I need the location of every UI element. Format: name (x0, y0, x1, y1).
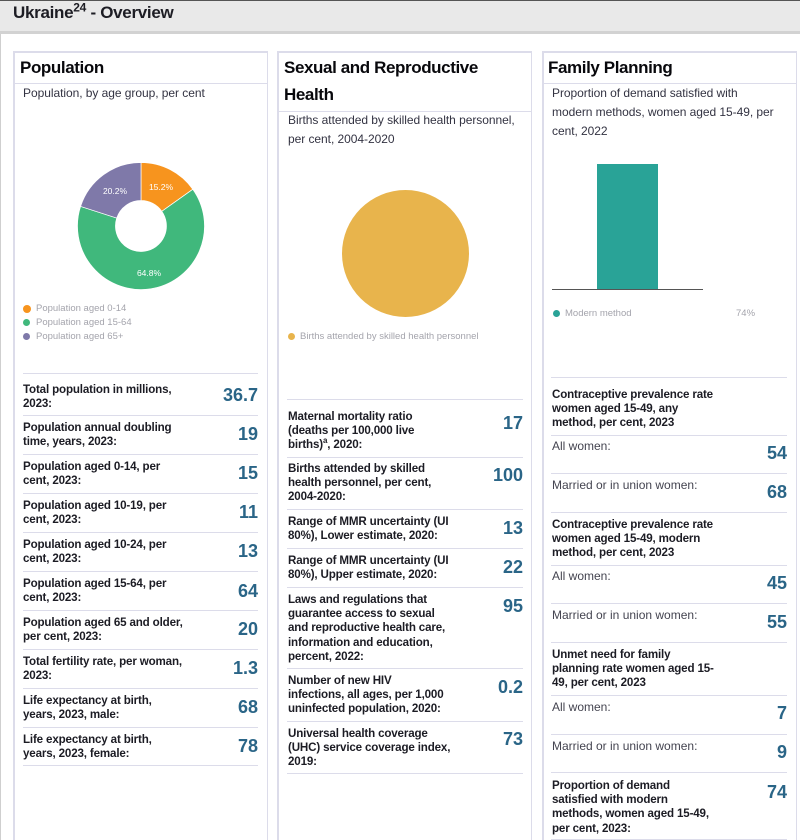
stat: births attended: 2004-2020: (288, 490, 346, 503)
value: aged 15-64: 64 (238, 581, 258, 601)
stat: CPR any method (552, 388, 713, 429)
stat: aged 10-24 (23, 538, 166, 565)
stat: new HIV infections: infections, all ages, per 1,000 (288, 688, 444, 701)
stat: demand satisfied (552, 779, 709, 835)
stat: maternal mortality: Maternal mortality ratio (288, 410, 412, 423)
stat: CPR modern method (552, 518, 713, 559)
bar chart: modern method (552, 164, 703, 290)
stat: MMR upper: Range of MMR uncertainty (UI (288, 554, 448, 567)
stat: doubling time (23, 421, 171, 448)
stat: aged 10-19 (23, 499, 166, 526)
value: aged 10-19: 11 (239, 502, 258, 522)
legend: population (23, 303, 132, 342)
legend: modern method: Modern method (565, 308, 632, 319)
value: CPR any all women: 54 (767, 443, 787, 463)
value: doubling time: 19 (238, 424, 258, 444)
stat: MMR lower: 80%), Lower estimate, 2020: (288, 529, 438, 542)
stat: maternal mortality (288, 410, 414, 451)
value: demand satisfied: 74 (767, 782, 787, 802)
value: maternal mortality: 17 (503, 413, 523, 433)
stat: laws and regulations: information and education, (288, 636, 433, 649)
stat: aged 15-64 (23, 577, 166, 604)
stat: UHC index: 2019: (288, 755, 317, 768)
chart subtitle: births attended: per cent, 2004-2020 (288, 132, 394, 146)
stat: new HIV infections: Number of new HIV (288, 674, 392, 687)
stat: UHC index: Universal health coverage (288, 727, 428, 740)
donut chart: population by age group (78, 163, 204, 290)
panel: population (13, 51, 268, 840)
stat: aged 0-14: cent, 2023: (23, 474, 81, 487)
stat: aged 65 and older (23, 616, 183, 643)
stat: unmet need (552, 648, 714, 689)
heading: family planning: Family Planning (548, 58, 672, 77)
chart subtitle: demand satisfied: modern methods, women aged 15-49, per (552, 105, 774, 119)
chart subtitle: births attended: Births attended by skilled health personnel, (288, 113, 515, 127)
panel: sexual and reproductive health (277, 51, 532, 840)
donut chart: population by age group: 20.2% (103, 186, 127, 196)
stat: new HIV infections (288, 674, 444, 715)
stat: aged 0-14 (23, 460, 160, 487)
value: CPR modern all women: 45 (767, 573, 787, 593)
stat: demand satisfied: satisfied with modern (552, 793, 668, 806)
stat: unmet need: 49, per cent, 2023 (552, 676, 646, 689)
stat: life expectancy female: years, 2023, female: (23, 747, 129, 760)
panel: family planning (542, 51, 797, 840)
value: aged 65 and older: 20 (238, 619, 258, 639)
page header bar (0, 0, 800, 34)
stat: life expectancy male (23, 694, 152, 721)
value: CPR any married women: 68 (767, 482, 787, 502)
value: aged 10-24: 13 (238, 541, 258, 561)
note: all women: All women: (552, 569, 611, 583)
stat: life expectancy female: Life expectancy at birth, (23, 733, 152, 746)
stat: aged 10-19: Population aged 10-19, per (23, 499, 166, 512)
page edge (0, 34, 1, 840)
stat: aged 10-24: Population aged 10-24, per (23, 538, 166, 551)
stat: demand satisfied: Proportion of demand (552, 779, 670, 792)
stat: aged 65 and older: Population aged 65 and older, (23, 616, 183, 629)
legend: modern method: 74% (736, 308, 755, 319)
note: all women: All women: (552, 439, 611, 453)
stat: MMR lower: Range of MMR uncertainty (UI (288, 515, 448, 528)
value: MMR upper: 22 (503, 557, 523, 577)
stat: total population (23, 383, 171, 410)
value: CPR modern married women: 55 (767, 612, 787, 632)
stat: MMR upper: 80%), Upper estimate, 2020: (288, 568, 437, 581)
stat: UHC index (288, 727, 450, 768)
value: unmet married women: 9 (777, 742, 787, 762)
stat: aged 65 and older: per cent, 2023: (23, 630, 102, 643)
stat: total population: 2023: (23, 397, 52, 410)
stat: demand satisfied: per cent, 2023: (552, 822, 631, 835)
stat: maternal mortality: births)a, 2020: (288, 437, 362, 451)
value: aged 0-14: 15 (238, 463, 258, 483)
stat: UHC index: (UHC) service coverage index, (288, 741, 450, 754)
value: laws and regulations: 95 (503, 596, 523, 616)
stat: life expectancy female (23, 733, 152, 760)
stat: laws and regulations: guarantee access to sexual (288, 607, 435, 620)
value: life expectancy female: 78 (238, 736, 258, 756)
stat: new HIV infections: uninfected population, 2020: (288, 702, 441, 715)
note: married women: Married or in union women: (552, 478, 697, 492)
stat: aged 15-64: Population aged 15-64, per (23, 577, 166, 590)
stat: unmet need: planning rate women aged 15- (552, 662, 714, 675)
stat: aged 10-19: cent, 2023: (23, 513, 81, 526)
stat: unmet need: Unmet need for family (552, 648, 670, 661)
chart subtitle: demand satisfied: Proportion of demand satisfied with (552, 86, 738, 100)
stat: births attended (288, 462, 431, 503)
bar: modern method (597, 164, 658, 289)
stat: MMR upper (288, 554, 448, 581)
stat: life expectancy male: Life expectancy at birth, (23, 694, 152, 707)
stat: fertility rate (23, 655, 182, 682)
value: total population: 36.7 (223, 385, 258, 405)
heading: sexual and reproductive health (284, 58, 478, 104)
heading: population: Population (20, 58, 104, 77)
stat: doubling time: Population annual doubling (23, 421, 171, 434)
stat: aged 15-64: cent, 2023: (23, 591, 81, 604)
stat: maternal mortality: (deaths per 100,000 live (288, 424, 414, 437)
chart subtitle: births attended (288, 113, 515, 146)
stat: fertility rate: Total fertility rate, per woman, (23, 655, 182, 668)
chart subtitle: population: Population, by age group, per cent (23, 86, 205, 100)
donut chart: population by age group: 64.8% (137, 268, 161, 278)
value: unmet all women: 7 (777, 703, 787, 723)
value: new HIV infections: 0.2 (498, 677, 523, 697)
stat: CPR any method: method, per cent, 2023 (552, 416, 674, 429)
stat: CPR any method: women aged 15-49, any (552, 402, 678, 415)
stat: doubling time: time, years, 2023: (23, 435, 117, 448)
chart subtitle: demand satisfied: cent, 2022 (552, 124, 608, 138)
stat: total population: Total population in millions, (23, 383, 171, 396)
stat: laws and regulations: and reproductive health care, (288, 621, 445, 634)
pie chart: births attended (342, 190, 469, 317)
stat: CPR any method: Contraceptive prevalence rate (552, 388, 713, 401)
note: all women: All women: (552, 700, 611, 714)
stat: births attended: Births attended by skilled (288, 462, 425, 475)
value: UHC index: 73 (503, 729, 523, 749)
stat: CPR modern method: Contraceptive prevalence rate (552, 518, 713, 531)
value: life expectancy male: 68 (238, 697, 258, 717)
stat: fertility rate: 2023: (23, 669, 52, 682)
legend: births attended: Births attended by skilled health personnel (300, 331, 479, 342)
legend: population: Population aged 65+ (36, 331, 123, 342)
stat: laws and regulations (288, 593, 445, 663)
stat: life expectancy male: years, 2023, male: (23, 708, 119, 721)
legend: modern method (553, 308, 755, 319)
axis line (552, 289, 703, 290)
stat: laws and regulations: percent, 2022: (288, 650, 364, 663)
stat: CPR modern method: method, per cent, 2023 (552, 546, 674, 559)
note: married women: Married or in union women: (552, 608, 697, 622)
value: fertility rate: 1.3 (233, 658, 258, 678)
stat: CPR modern method: women aged 15-49, modern (552, 532, 700, 545)
note: married women: Married or in union women: (552, 739, 697, 753)
chart subtitle: demand satisfied (552, 86, 774, 138)
stat: aged 0-14: Population aged 0-14, per (23, 460, 160, 473)
legend: population: Population aged 15-64 (36, 317, 132, 328)
stat: laws and regulations: Laws and regulations that (288, 593, 427, 606)
stat: aged 10-24: cent, 2023: (23, 552, 81, 565)
heading: sexual and reproductive health: Sexual and Reproductive (284, 58, 478, 77)
heading: sexual and reproductive health: Health (284, 85, 334, 104)
value: births attended: 100 (493, 465, 523, 485)
stat: demand satisfied: methods, women aged 15-49, (552, 807, 709, 820)
legend: population: Population aged 0-14 (36, 303, 126, 314)
title: Ukraine24 - Overview (13, 0, 173, 22)
value: MMR lower: 13 (503, 518, 523, 538)
stat: births attended: health personnel, per cent, (288, 476, 431, 489)
stat: MMR lower (288, 515, 448, 542)
donut chart: population by age group: 15.2% (149, 182, 173, 192)
